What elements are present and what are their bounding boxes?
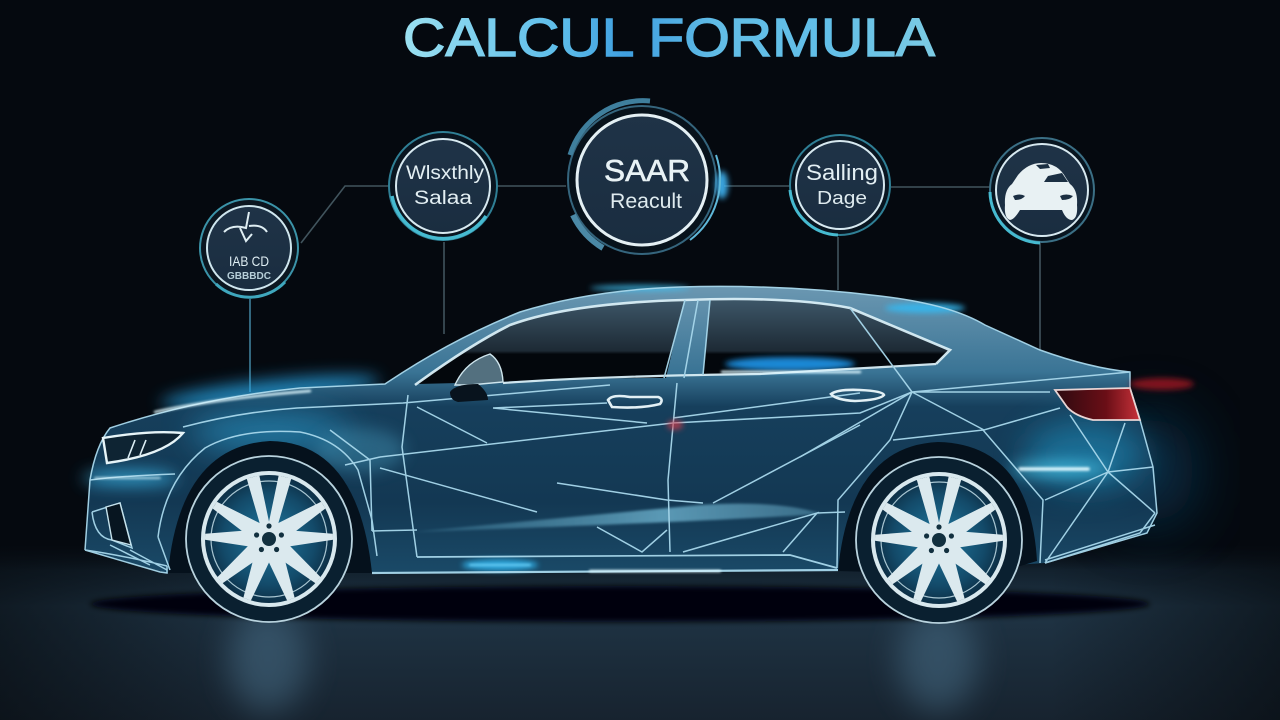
icon: car front <box>1005 163 1077 220</box>
circle: SAAR result <box>568 101 728 254</box>
circle: monthly sales input: GBBBDC <box>227 271 271 282</box>
title: CALCUL FORMULA <box>403 8 935 68</box>
ambient glow behind car <box>1105 415 1195 525</box>
circle: SAAR result: Reacult <box>610 190 682 213</box>
red light trail <box>1130 378 1194 390</box>
circle: monthly sales input <box>200 199 298 297</box>
ground shadow <box>90 586 1150 622</box>
wheel arches <box>168 441 372 573</box>
circle: selling days: Dage <box>817 188 867 208</box>
tail light <box>1055 388 1140 420</box>
body line art <box>85 286 1157 573</box>
front grille <box>106 503 131 545</box>
door handle: rear <box>831 390 884 401</box>
wheel: front <box>186 456 352 622</box>
circle: selling days: Salling <box>806 160 878 185</box>
car body <box>85 286 1157 573</box>
circle: monthly sales: Salaa <box>414 188 472 209</box>
car halo <box>159 369 381 415</box>
circle: SAAR result: SAAR <box>604 153 690 188</box>
floor <box>0 545 1280 720</box>
icon: symbol <box>224 212 267 241</box>
circle: selling days <box>790 135 890 235</box>
red door accent <box>667 420 683 430</box>
circle: monthly sales <box>389 132 497 240</box>
glowing highlight lines <box>95 372 1088 571</box>
circle: monthly sales input: IAB CD <box>229 253 269 269</box>
windows <box>417 300 684 384</box>
lower sheen <box>412 504 822 532</box>
connector lines <box>250 186 1040 392</box>
circle: monthly sales: Wlsxthly <box>406 163 485 184</box>
door handle: front <box>608 396 662 408</box>
body glows <box>82 285 1145 571</box>
wheel: rear <box>856 457 1022 623</box>
mirror <box>450 354 503 402</box>
car <box>82 285 1194 623</box>
headlight <box>103 432 183 463</box>
circle: car icon <box>990 138 1094 243</box>
